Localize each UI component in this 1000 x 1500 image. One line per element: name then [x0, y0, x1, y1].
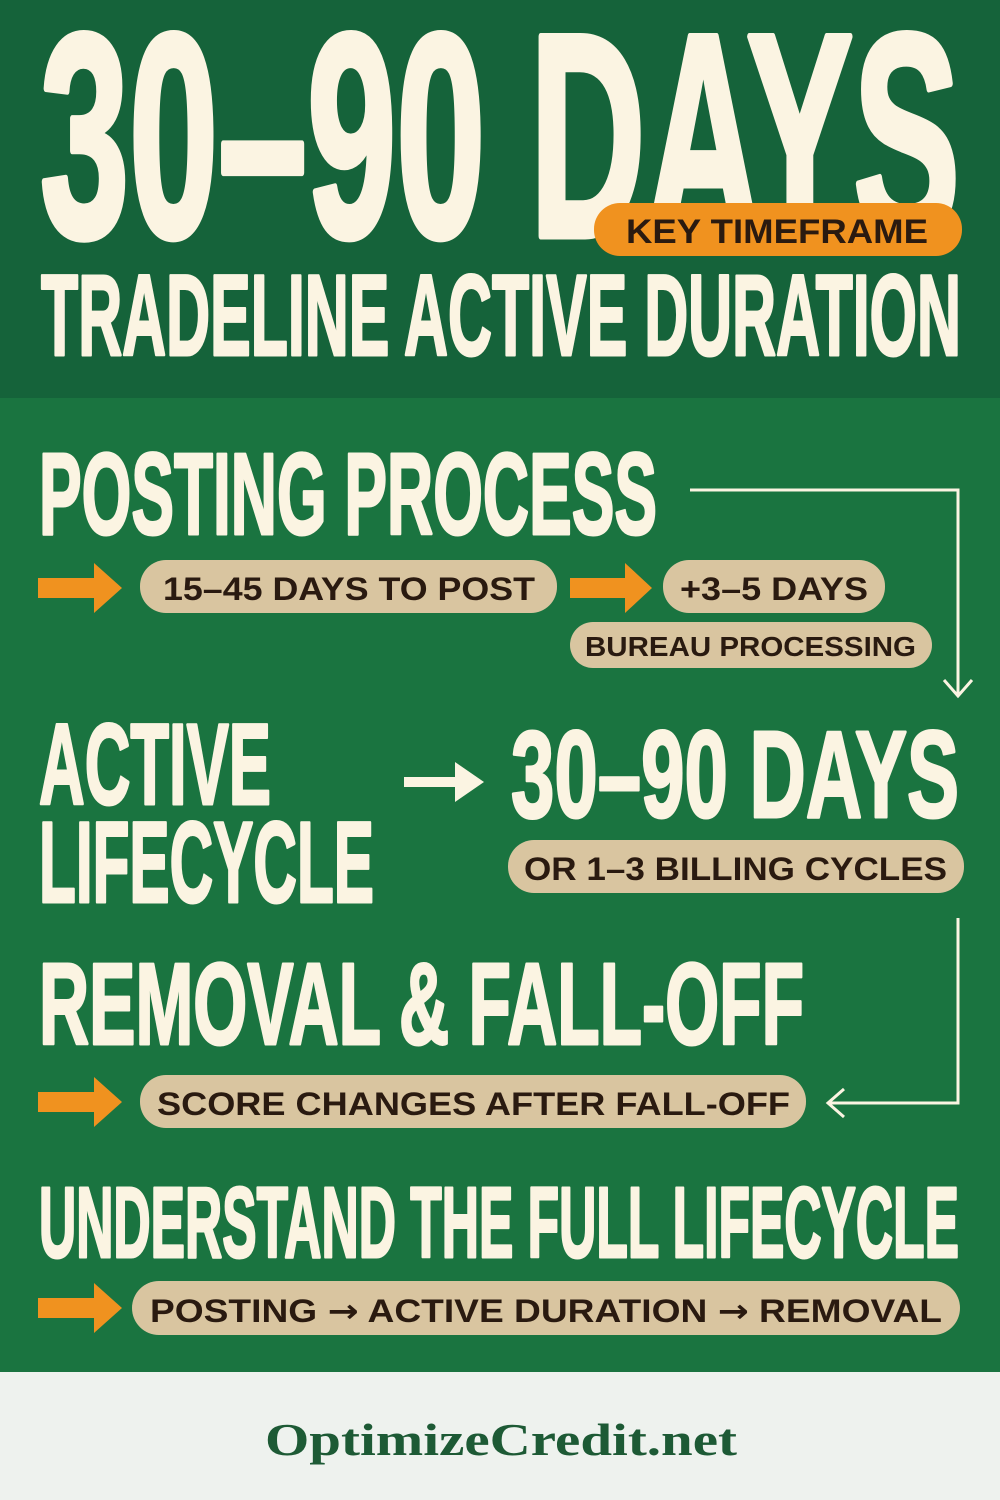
badge: key timeframe: KEY TIMEFRAME	[626, 213, 928, 251]
pill: +3-5 days	[663, 560, 885, 613]
pill: 15-45 days: 15–45 DAYS TO POST	[163, 571, 536, 607]
header band	[0, 0, 1000, 398]
posting steps row	[38, 560, 932, 668]
icon: orange arrow 2	[570, 563, 652, 613]
heading: active lifecycle: ACTIVE	[39, 701, 271, 829]
pill: 15-45 days	[140, 560, 557, 613]
footer: OptimizeCredit.net	[265, 1414, 738, 1465]
pill: billing cycles: OR 1–3 BILLING CYCLES	[524, 851, 947, 887]
removal row: SCORE CHANGES AFTER FALL-OFF	[157, 1086, 790, 1122]
summary row: POSTING → ACTIVE DURATION → REMOVAL	[150, 1292, 942, 1330]
heading: active lifecycle: LIFECYCLE	[39, 799, 374, 927]
removal row	[38, 1075, 806, 1128]
pill: +3-5 days: +3–5 DAYS	[680, 571, 868, 607]
connector arrow 2	[828, 918, 958, 1117]
icon: orange arrow	[38, 563, 122, 613]
arrow: cream	[404, 762, 484, 802]
heading: active lifecycle	[39, 701, 374, 927]
connector arrow 1	[690, 490, 972, 696]
footer	[0, 1372, 1000, 1500]
pill: bureau processing: BUREAU PROCESSING	[585, 631, 916, 662]
pill: bureau processing	[570, 622, 932, 668]
summary row	[38, 1281, 960, 1335]
pill: billing cycles	[508, 840, 964, 893]
badge: key timeframe	[594, 203, 962, 256]
